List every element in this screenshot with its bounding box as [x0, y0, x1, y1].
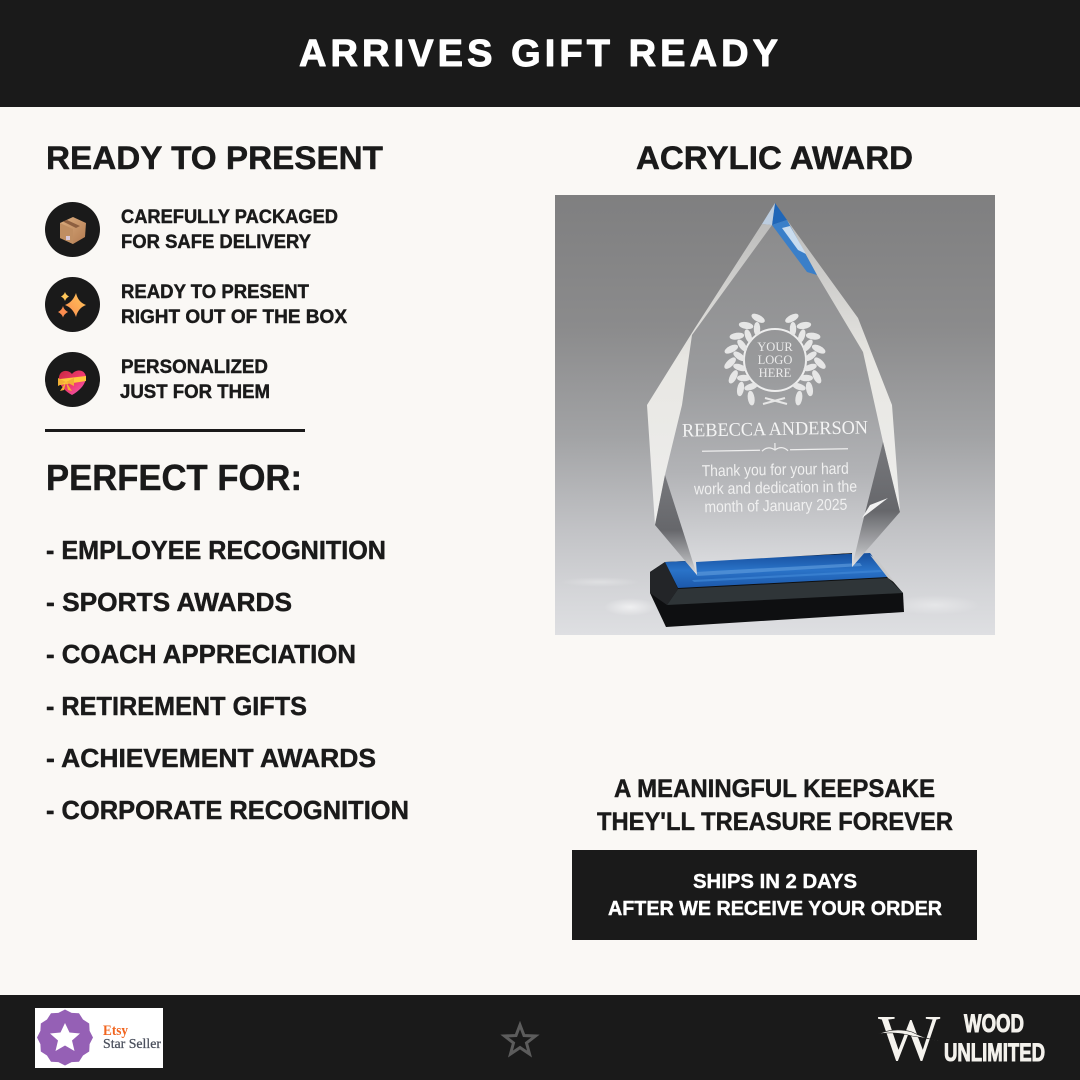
engraved message: Thank you for your hard — [702, 461, 849, 480]
tagline — [597, 775, 953, 836]
logo: wood unlimited — [878, 1002, 1045, 1075]
panel: ready to present — [45, 140, 383, 407]
text: wood unlimited: WOOD — [964, 1010, 1024, 1038]
engraved logo wreath: YOUR — [757, 340, 793, 354]
badge: etsy star seller — [35, 1008, 163, 1068]
feature: ready — [45, 277, 347, 332]
text: etsy star seller: Etsy — [103, 1023, 128, 1039]
engraved name: REBECCA ANDERSON — [682, 417, 868, 442]
engraved message — [693, 461, 858, 516]
photo: acrylic award — [555, 195, 995, 635]
list of uses: - COACH APPRECIATION — [46, 639, 356, 669]
tagline: THEY'LL TREASURE FOREVER — [597, 808, 953, 836]
acrylic body — [647, 203, 900, 575]
shipping callout: AFTER WE RECEIVE YOUR ORDER — [608, 898, 943, 920]
award base — [650, 553, 904, 627]
text: carefully packaged: FOR SAFE DELIVERY — [121, 232, 311, 253]
icon: heart with ribbon — [45, 352, 100, 407]
list of uses: - RETIREMENT GIFTS — [46, 691, 307, 721]
list of uses: - ACHIEVEMENT AWARDS — [46, 743, 376, 773]
text: ready to present: READY TO PRESENT — [121, 282, 309, 303]
text: ready to present — [121, 282, 347, 328]
text: wood unlimited — [944, 1010, 1045, 1067]
text: personalized: JUST FOR THEM — [120, 382, 270, 403]
heading: acrylic award: ACRYLIC AWARD — [636, 140, 913, 176]
icon: footer star — [504, 1025, 536, 1054]
tagline: A MEANINGFUL KEEPSAKE — [614, 775, 935, 803]
text: carefully packaged: CAREFULLY PACKAGED — [121, 207, 338, 228]
list of uses — [46, 535, 409, 825]
engraved logo wreath: LOGO — [758, 353, 792, 367]
heading: perfect for: PERFECT FOR: — [46, 457, 302, 498]
shipping callout — [572, 850, 977, 940]
icon: sparkles — [45, 277, 100, 332]
text: etsy star seller: Star Seller — [103, 1036, 162, 1051]
text: carefully packaged — [121, 207, 338, 253]
list of uses: - SPORTS AWARDS — [46, 587, 292, 617]
text: personalized: PERSONALIZED — [121, 357, 268, 378]
icon: parcel box — [45, 202, 100, 257]
header band — [0, 0, 1080, 107]
feature: packaged — [45, 202, 338, 257]
facets — [647, 224, 772, 525]
engraved logo wreath: HERE — [759, 366, 792, 380]
panel: perfect for — [46, 457, 409, 825]
icon: purple star badge — [37, 1010, 93, 1066]
engraved message: work and dedication in the — [693, 479, 857, 498]
list of uses: - EMPLOYEE RECOGNITION — [46, 535, 386, 565]
footer band — [0, 995, 1080, 1080]
logo mark: W — [878, 1002, 941, 1075]
text: wood unlimited: UNLIMITED — [944, 1039, 1045, 1067]
heading: ready to present: READY TO PRESENT — [46, 140, 383, 176]
laurel leaves — [724, 313, 826, 405]
engraved divider — [702, 442, 848, 452]
text: etsy star seller — [103, 1023, 162, 1051]
list of uses: - CORPORATE RECOGNITION — [46, 795, 409, 825]
feature: personalized — [45, 352, 270, 407]
title: ARRIVES GIFT READY — [299, 33, 778, 75]
text: ready to present: RIGHT OUT OF THE BOX — [121, 307, 347, 328]
text: personalized — [120, 357, 270, 403]
engraved logo wreath — [724, 313, 826, 405]
shipping callout: SHIPS IN 2 DAYS — [693, 871, 857, 893]
engraved message: month of January 2025 — [704, 497, 848, 516]
